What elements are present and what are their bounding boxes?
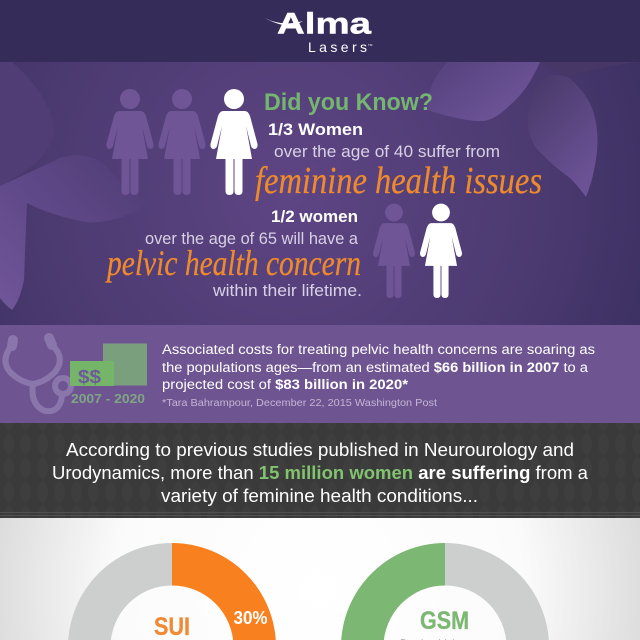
chart: cost bars	[70, 344, 147, 406]
donut chart: SUI	[68, 543, 276, 640]
panel: associated costs	[0, 325, 640, 423]
woman icon: white highlighted	[210, 89, 258, 195]
text: over 40: over the age of 40 suffer from	[274, 142, 500, 161]
woman icon: faded 1	[106, 89, 154, 195]
woman icon: faded 2	[158, 89, 206, 195]
panel: conditions	[0, 518, 640, 640]
woman icon: faded 3	[373, 204, 415, 298]
panel: did you know	[0, 62, 640, 325]
text: lifetime: within their lifetime.	[212, 281, 362, 300]
donut value: 30 percent: 30%	[234, 608, 268, 628]
logo: Alma Lasers: TM	[368, 43, 373, 47]
woman icon: white second	[420, 204, 462, 298]
donut label: GSM: GSM	[420, 607, 469, 635]
script: feminine health issues: feminine health issues	[255, 160, 542, 202]
header band	[0, 0, 640, 62]
stat: one half: 1/2 women	[271, 207, 358, 226]
text: studies line 2: Urodynamics, more than 15 million women are suffering from a	[52, 462, 589, 483]
text: studies line 1: According to previous studies published in Neurourology and	[66, 439, 574, 460]
leaf: right sliver	[540, 62, 640, 77]
chart label: dollars: $$	[78, 367, 101, 387]
leaf: right	[528, 75, 598, 197]
panel: fifteen million women	[0, 423, 640, 518]
text: studies line 3: variety of feminine health conditions...	[161, 485, 478, 506]
chart label: years: 2007 - 2020	[71, 391, 145, 406]
text: over 65: over the age of 65 will have a	[145, 229, 359, 248]
text: cost line 1: Associated costs for treating pelvic health concerns are soaring as	[162, 342, 595, 357]
icon: stethoscope	[5, 338, 71, 411]
leaf: upper left	[0, 62, 54, 186]
script: pelvic health concern: pelvic health concern	[105, 243, 361, 283]
donut chart: GSM	[341, 543, 549, 640]
logo: Alma Lasers: Alma	[277, 8, 371, 40]
logo: Alma Lasers: Lasers	[308, 39, 367, 55]
leaf: top centre	[427, 62, 540, 121]
text: source note: *Tara Bahrampour, December 22, 2015 Washington Post	[162, 397, 437, 409]
text: cost line 3: projected cost of $83 billion in 2020*	[162, 377, 409, 392]
heading: did you know: Did you Know?	[264, 89, 433, 116]
stat: one third: 1/3 Women	[268, 120, 363, 139]
logo: Alma Lasers	[265, 8, 373, 55]
text: cost line 2: the populations ages—from an estimated $66 billion in 2007 to a	[162, 360, 589, 375]
leaf: lower left	[0, 155, 148, 310]
